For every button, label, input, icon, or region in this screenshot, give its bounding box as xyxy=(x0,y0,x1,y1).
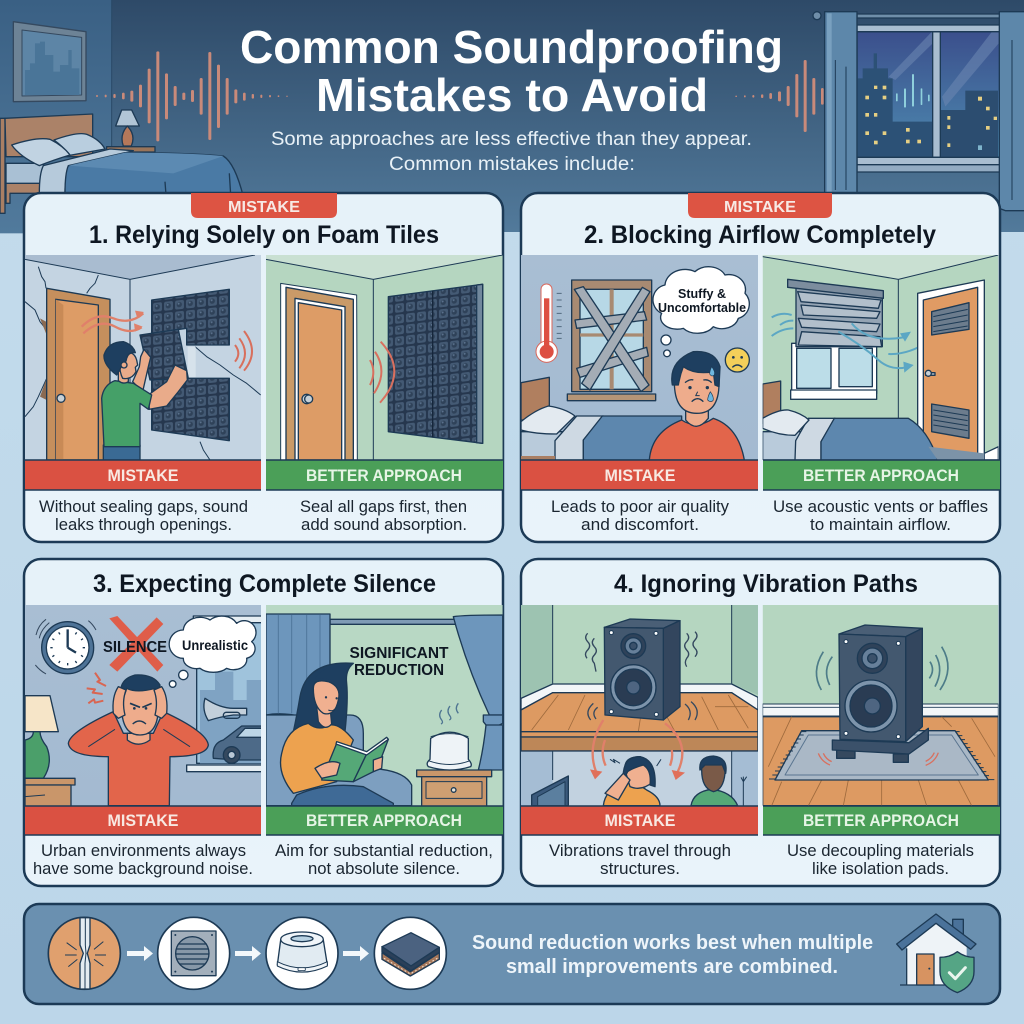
icon: arrow xyxy=(343,946,369,961)
illustration: better sealed door and foam xyxy=(266,255,503,460)
subtitle xyxy=(271,128,752,175)
icon: sealed crack xyxy=(48,917,120,989)
label bar: better approach xyxy=(266,460,503,490)
title xyxy=(240,21,783,121)
icon: arrow xyxy=(235,946,261,961)
text: mistake description xyxy=(551,497,729,534)
label bar: mistake: MISTAKE xyxy=(108,811,178,830)
label bar: mistake: MISTAKE xyxy=(604,466,676,485)
heading: card 4: 4. Ignoring Vibration Paths xyxy=(614,570,918,598)
badge: mistake xyxy=(191,193,337,218)
panel: card 3 silence xyxy=(24,559,503,886)
illustration: mistake man covering ears xyxy=(25,605,263,807)
subtitle: Common mistakes include: xyxy=(389,153,635,175)
text: better description: like isolation pads. xyxy=(812,859,949,878)
icon: house with shield xyxy=(897,914,976,993)
text: summary message: Sound reduction works best when multiple xyxy=(472,932,873,954)
heading: card 3: 3. Expecting Complete Silence xyxy=(93,570,436,598)
text: mistake description xyxy=(549,841,731,878)
text: better description: Use acoustic vents or baffles xyxy=(773,497,988,516)
illustration: better speaker on isolation pads xyxy=(763,605,998,806)
illustration: better vented room xyxy=(763,255,998,460)
callout: stuffy and uncomfortable: Uncomfortable xyxy=(658,301,746,315)
illustration: mistake blocked window xyxy=(521,255,758,460)
text: mistake description xyxy=(39,497,248,534)
text: better description: Aim for substantial reduction, xyxy=(275,841,493,860)
badge: mistake: MISTAKE xyxy=(228,199,300,216)
label bar: better approach: BETTER APPROACH xyxy=(306,811,462,830)
panel: card 4 vibration xyxy=(521,559,1000,886)
subtitle: Some approaches are less effective than they appear. xyxy=(271,128,752,150)
callout: stuffy and uncomfortable: Stuffy & xyxy=(678,287,726,301)
text: summary message: small improvements are combined. xyxy=(506,956,838,978)
icon: isolation pad xyxy=(374,917,446,989)
label bar: mistake xyxy=(521,460,758,490)
badge: mistake xyxy=(688,193,832,218)
panel: bottom summary bar xyxy=(24,904,1000,1004)
label bar: better approach: BETTER APPROACH xyxy=(306,466,462,485)
text: better description xyxy=(275,841,493,878)
title: Common Soundproofing xyxy=(240,21,783,73)
text: better description: not absolute silence. xyxy=(308,859,460,878)
badge: mistake: MISTAKE xyxy=(724,199,796,216)
text: better description xyxy=(300,497,467,534)
illustration: night window with curtains xyxy=(813,12,1024,211)
label bar: better approach: BETTER APPROACH xyxy=(803,466,959,485)
text: mistake description: Urban environments always xyxy=(41,841,246,860)
label bar: better approach: BETTER APPROACH xyxy=(803,811,959,830)
illustration: better woman reading xyxy=(266,605,503,807)
text: better description: Use decoupling materials xyxy=(787,841,974,860)
label bar: better approach xyxy=(763,806,1000,835)
label bar: better approach xyxy=(266,806,503,835)
header banner xyxy=(0,0,1024,233)
icon: white noise device xyxy=(266,917,338,989)
text: better description: add sound absorption. xyxy=(301,515,467,534)
icon: acoustic vent xyxy=(158,917,230,989)
title: Mistakes to Avoid xyxy=(316,69,708,121)
label: significant reduction xyxy=(350,645,449,679)
callout: unrealistic: Unrealistic xyxy=(182,638,248,653)
icon: left sound wave xyxy=(96,51,288,141)
text: mistake description: structures. xyxy=(600,859,680,878)
illustration: mistake speaker on floor xyxy=(521,605,758,806)
label bar: mistake: MISTAKE xyxy=(108,466,178,485)
text: mistake description: and discomfort. xyxy=(581,515,699,534)
text: better description: Seal all gaps first, then xyxy=(300,497,467,516)
text: mistake description: Without sealing gaps, sound xyxy=(39,497,248,516)
icon: right sound wave xyxy=(735,60,824,132)
label bar: mistake xyxy=(25,460,261,490)
illustration: mistake foam on cracked wall xyxy=(25,255,261,460)
text: mistake description: Leads to poor air quality xyxy=(551,497,729,516)
text: mistake description xyxy=(33,841,253,878)
callout: stuffy and uncomfortable xyxy=(658,287,746,315)
panel: card 2 airflow xyxy=(521,193,1000,542)
heading: card 1: 1. Relying Solely on Foam Tiles xyxy=(89,221,439,249)
label bar: mistake: MISTAKE xyxy=(604,811,676,830)
text: better description: to maintain airflow. xyxy=(810,515,951,534)
icon: arrow xyxy=(127,946,153,961)
illustration: bedroom at left of header xyxy=(0,0,243,233)
label: significant reduction: REDUCTION xyxy=(354,662,444,679)
text: summary message xyxy=(472,932,873,978)
text: better description xyxy=(773,497,988,534)
label bar: mistake xyxy=(25,806,261,835)
text: mistake description: Vibrations travel through xyxy=(549,841,731,860)
heading: card 2: 2. Blocking Airflow Completely xyxy=(584,221,936,249)
label bar: mistake xyxy=(521,806,758,835)
label: silence crossed out: SILENCE xyxy=(103,639,167,656)
panel: card 1 foam tiles xyxy=(24,193,503,542)
text: mistake description: leaks through openings. xyxy=(55,515,232,534)
label: significant reduction: SIGNIFICANT xyxy=(350,645,449,662)
text: mistake description: have some background noise. xyxy=(33,859,253,878)
label bar: better approach xyxy=(763,460,1000,490)
text: better description xyxy=(787,841,974,878)
